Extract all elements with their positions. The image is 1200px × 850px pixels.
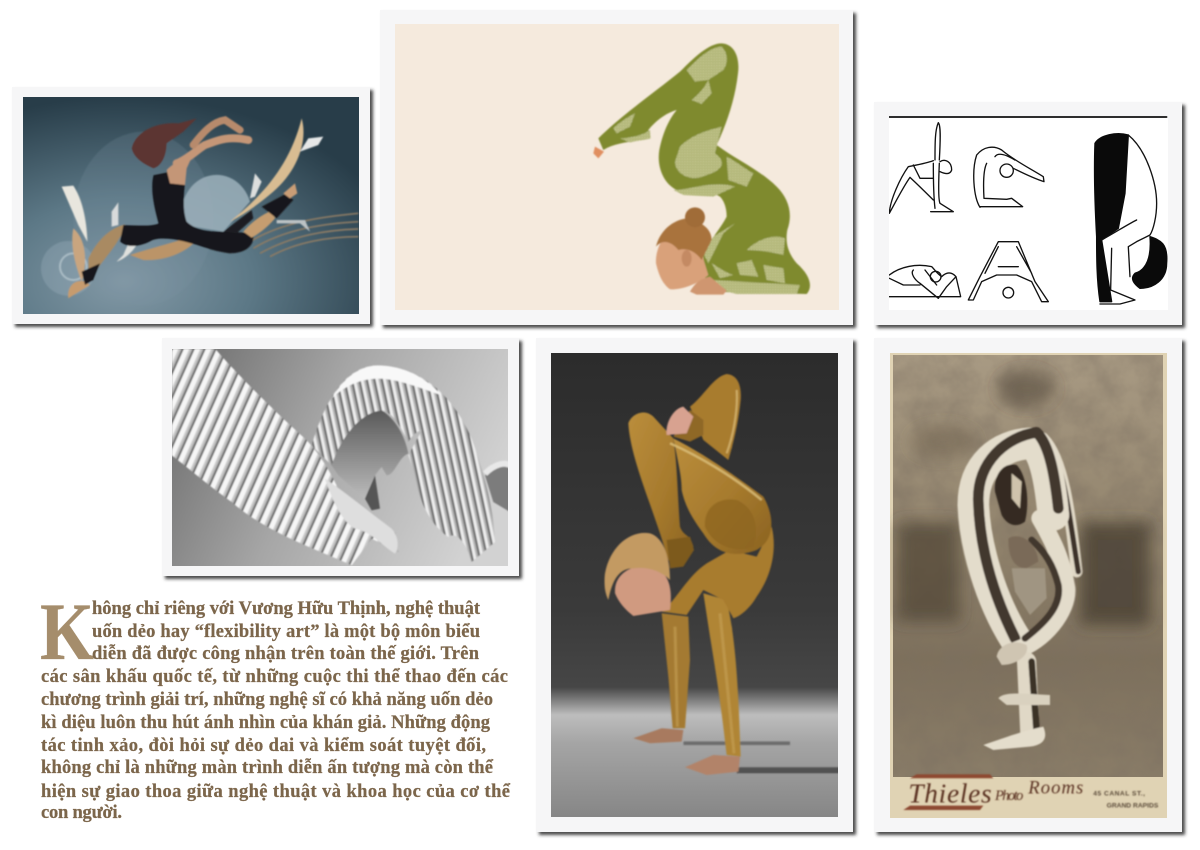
triangle pose figure [889,123,953,213]
photo frame: contortionist in gold handstand [536,338,857,832]
far leg [690,374,741,460]
hair [132,118,197,168]
photo frame: vintage sepia contortionist card: 45 CANAL ST., [1093,791,1145,798]
head and hair [615,566,671,616]
standing forward fold silhouette, dark side [1095,134,1128,302]
photo frame: vintage sepia contortionist card: Photo [994,788,1023,804]
striped figure [973,432,1078,735]
studio imprint [903,774,993,810]
text block: article paragraph with drop cap: không chỉ là những màn trình diễn ấn tượng mà còn thể [41,758,494,778]
right arch underside [408,412,495,562]
clasped hands [997,642,1027,665]
gold torso [662,527,774,618]
shoes [983,727,1045,750]
near thigh [673,438,771,554]
gold arms [662,613,690,728]
wide-leg inverted figure [968,242,1048,302]
green body [598,43,810,294]
drop cap K: K [40,586,94,677]
near shin [628,412,693,565]
dancer body and legs [120,172,254,253]
photo frame: vintage sepia contortionist card: Rooms [1027,777,1083,798]
photo frame: contortionist in green [380,10,853,325]
text block: article paragraph with drop cap: uốn dẻo hay “flexibility art” là một bộ môn biểu [92,622,480,642]
head and hair [655,241,709,290]
text block: article paragraph with drop cap: tác tinh xảo, đòi hỏi sự dẻo dai và kiểm soát tuyệt đối, [41,736,486,756]
photo frame: vintage sepia contortionist card [874,338,1182,832]
hands [673,410,703,442]
paddle end [325,479,398,554]
floor shadows [683,742,790,745]
stained backdrop [998,370,1055,407]
text block: article paragraph with drop cap: hông chỉ riêng với Vương Hữu Thịnh, nghệ thuật [92,599,481,619]
text block: article paragraph with drop cap: các sân khấu quốc tế, từ những cuộc thi thể thao đến các [41,667,508,687]
torso skin, arms [166,160,191,186]
text block: article paragraph with drop cap: con người. [41,803,122,823]
photo frame: leaping dancer [12,87,370,324]
photo frame: white ribbed sculpture [162,338,519,576]
torso and head [1008,536,1038,568]
text block: article paragraph with drop cap: hiện sự giao thoa giữa nghệ thuật và khoa học của cơ thể [41,782,511,802]
backbend figure [974,147,1044,207]
photo frame: vintage sepia contortionist card: GRAND RAPIDS [1107,803,1159,810]
text block: article paragraph with drop cap: kì diệu luôn thu hút ánh nhìn của khán giả. Những động [41,713,491,733]
text block: article paragraph with drop cap: diễn đã được công nhận trên toàn thế giới. Trên [92,644,480,664]
photo frame: yoga pose line drawings [874,102,1182,325]
text block: article paragraph with drop cap: chương trình giải trí, những nghệ sĩ có khả năng uốn dẻo [41,690,493,710]
far right ribbon [484,466,508,512]
feathers [62,186,87,242]
text block: article paragraph with drop cap [40,586,511,823]
seated forward-bend figure [889,265,961,298]
left ribbed band [172,349,398,565]
arch crest [312,365,472,465]
photo frame: vintage sepia contortionist card: Thieles [908,778,992,808]
